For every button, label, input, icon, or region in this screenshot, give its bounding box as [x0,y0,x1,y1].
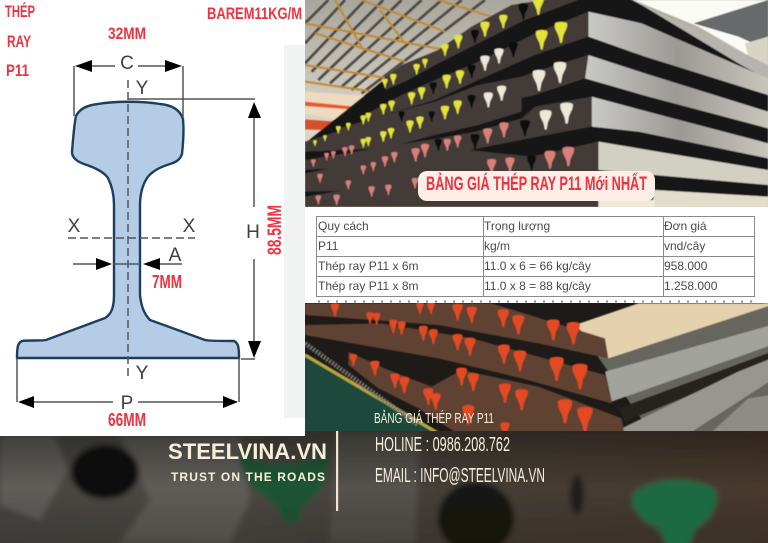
row: 8m: Thép ray P11 x 8m [318,279,418,293]
row: 8m: 11.0 x 8 = 88 kg/cây [484,279,591,293]
dimension P [17,358,239,402]
row: units [318,239,705,253]
footer contact: HOLINE : 0986.208.762 [375,434,510,456]
dimension C [74,66,183,118]
photo: stacked rails, red ends [302,302,768,438]
panel: rail diagram background [0,0,305,436]
row: 6m: 11.0 x 6 = 66 kg/cây [484,259,591,273]
diagram: P11 rail cross section: Y [136,363,149,384]
heading: Thép ray P11: P11 [6,61,29,80]
pink markers [311,122,574,205]
side strip [284,45,305,418]
banner: price table heading: BẢNG GIÁ THÉP RAY P11 Mới NHẤT [426,173,647,195]
label: head width: 32MM [108,24,146,43]
dark gaps between end faces [399,3,536,171]
row: 6m: Thép ray P11 x 6m [318,259,418,273]
diagram: P11 rail cross section [17,53,261,414]
row: 8m [318,279,718,293]
footer contact [374,410,545,487]
centre and X axes [68,80,195,380]
row: units: kg/m [484,239,510,253]
diagram: P11 rail cross section: Y [136,78,149,99]
diagram: P11 rail cross section: X [183,216,196,237]
row: 6m: 958.000 [664,259,708,273]
cut-off text line under table [318,300,752,302]
top right sky and wall [633,0,768,67]
silver rail sides [633,0,768,80]
diagram: P11 rail cross section: H [246,222,260,243]
footer divider [336,431,338,511]
photo: stacked rails, yellow and pink ends [305,0,768,207]
row: 8m: 1.258.000 [664,279,718,293]
row: header: Quy cách [318,219,369,233]
label: barem: BAREM11KG/M [207,4,302,23]
diagram: P11 rail cross section: P [121,393,133,414]
diagram: P11 rail cross section: A [169,245,182,266]
row: header: Trọng lượng [484,219,550,233]
dimension H [128,99,255,359]
floor line [305,355,438,433]
brown rows [305,303,625,438]
dark stack body [305,0,768,207]
footer brand [168,439,327,484]
label: web width: 7MM [152,272,182,292]
row: 6m [318,259,708,273]
dimension A [73,263,182,265]
ceiling [305,0,485,93]
footer brand: STEELVINA.VN [168,439,327,464]
heading: Thép ray P11: THÉP [5,2,35,21]
footer contact: BẢNG GIÁ THÉP RAY P11 [374,410,494,427]
row: units: P11 [318,239,339,253]
rail profile [17,102,239,358]
yellow markers [313,0,567,148]
red markers [331,302,593,437]
white markers [481,48,573,130]
diagram: P11 rail cross section: X [68,216,81,237]
banner: price table heading [418,171,655,201]
footer band [0,425,768,543]
heading: Thép ray P11 [5,2,35,80]
footer brand: TRUST ON THE ROADS [171,470,325,484]
row: units: vnd/cây [664,239,705,253]
label: height: 88.5MM [265,205,286,255]
row: header: Đơn giá [664,219,707,233]
heading: Thép ray P11: RAY [7,32,31,51]
axis letters: C [120,53,134,74]
row: header [318,219,707,233]
label: foot width: 66MM [108,410,146,430]
table panel [305,207,768,303]
factory floor [305,353,432,431]
price table [316,216,754,296]
silver rails [585,302,768,438]
footer contact: EMAIL : INFO@STEELVINA.VN [375,465,545,487]
end faces [305,0,598,207]
